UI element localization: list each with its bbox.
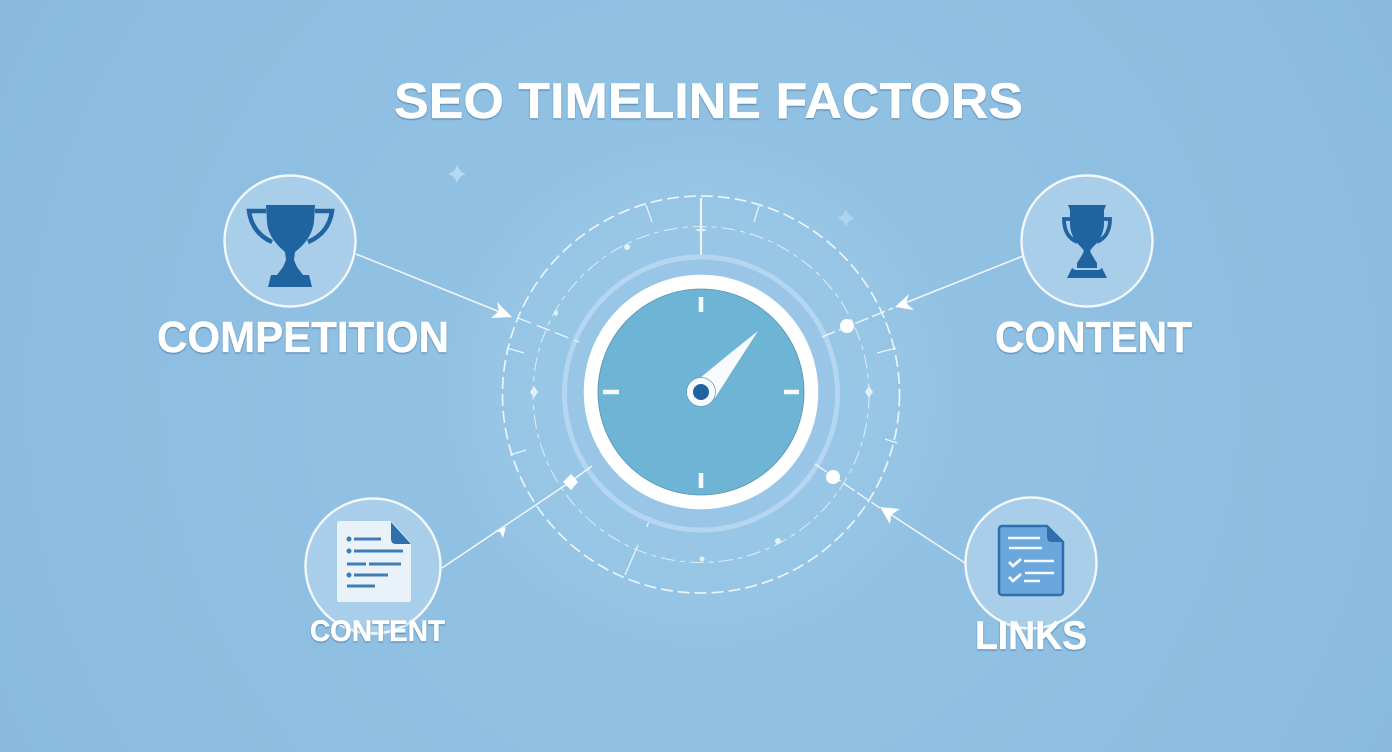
dial markers	[530, 228, 873, 562]
clock light ring	[564, 257, 838, 530]
competition circle	[224, 176, 356, 306]
panel: links	[966, 498, 1096, 658]
outer dashed dial with ticks	[502, 196, 900, 593]
clock hour ticks	[603, 297, 799, 488]
clock hand	[700, 331, 758, 398]
clock	[591, 282, 811, 502]
content circle	[1022, 176, 1152, 306]
links circle	[966, 498, 1096, 628]
arrow: competition to clock	[356, 254, 579, 342]
arrow: links to clock	[815, 464, 965, 563]
icon: checklist document	[999, 526, 1063, 595]
panel: top right content	[995, 176, 1192, 362]
content label: CONTENT	[310, 615, 445, 648]
content label: CONTENT	[995, 313, 1192, 362]
arrow: bottom left content to clock	[442, 466, 592, 568]
icon: small trophy	[1064, 205, 1110, 278]
arrow: top right content to clock	[822, 256, 1023, 337]
title: SEO TIMELINE FACTORS	[394, 73, 1023, 129]
icon: document	[337, 521, 411, 602]
content circle	[306, 498, 440, 634]
links label: LINKS	[975, 614, 1087, 658]
competition label: COMPETITION	[157, 313, 449, 362]
icon: decorative sparkles	[448, 165, 855, 227]
center glow	[431, 122, 971, 662]
icon: large trophy	[249, 205, 332, 287]
clock pivot	[686, 378, 716, 406]
panel: competition	[157, 176, 449, 362]
panel: bottom left content	[306, 498, 445, 648]
